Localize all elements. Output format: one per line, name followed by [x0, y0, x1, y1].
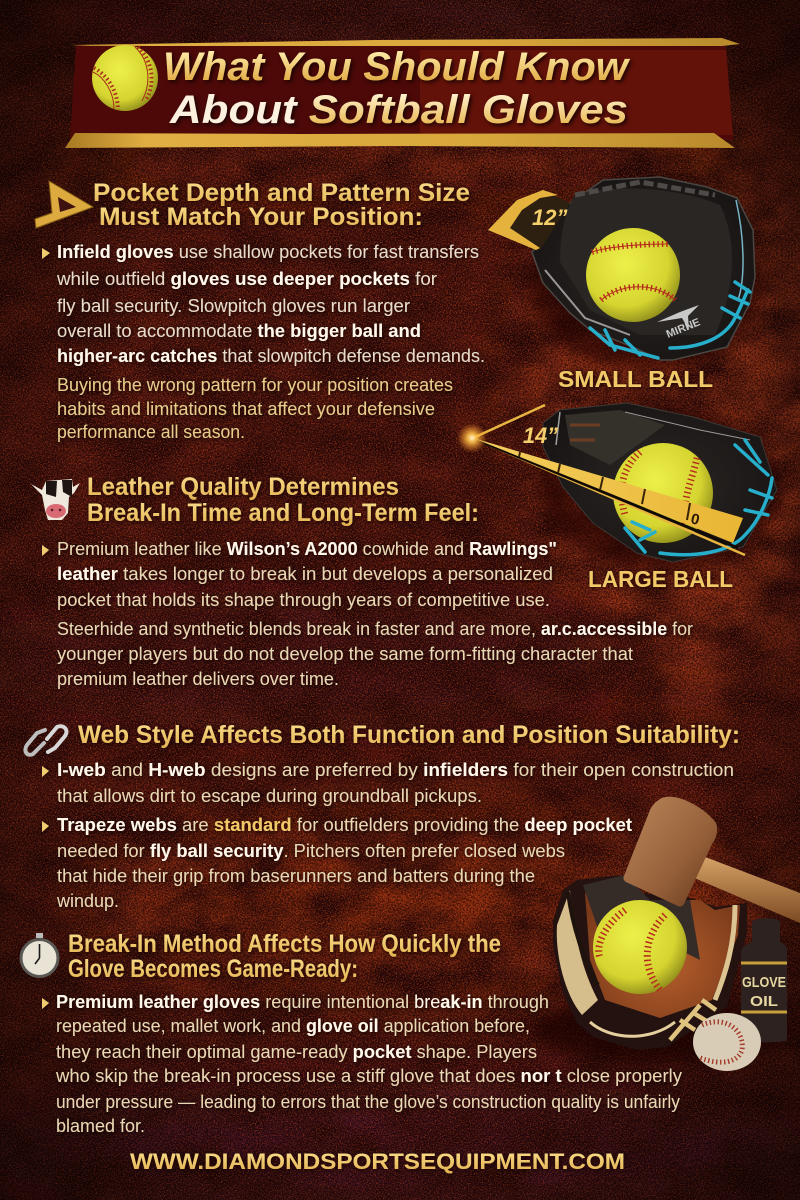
measuring tape and spark: 0: [689, 510, 701, 529]
section 4 body: who skip the break-in process use a stiff glove that does nor t close properly: [55, 1066, 682, 1086]
section 3 body: [42, 760, 734, 911]
wooden mallet: [628, 801, 800, 923]
section 1 body: [42, 242, 485, 442]
section 1 body: Buying the wrong pattern for your position creates: [57, 375, 453, 395]
section 2 heading: [87, 473, 479, 527]
blue laces: [590, 282, 750, 358]
section 1 body: higher-arc catches that slowpitch defense demands.: [57, 346, 485, 366]
bottle: glove oil: OIL: [750, 993, 778, 1010]
section 3 heading: Web Style Affects Both Function and Position Suitability:: [78, 721, 740, 749]
section 3 body: needed for fly ball security. Pitchers often prefer closed webs: [57, 841, 565, 861]
section 4: [21, 930, 682, 1136]
glove logo: [657, 305, 699, 330]
icon: chain link: [25, 726, 66, 755]
section 4 heading: Break-In Method Affects How Quickly the: [68, 930, 501, 958]
measuring tape and spark: 14”: [523, 423, 558, 448]
softball: [593, 900, 687, 994]
icon: triangle ruler: [35, 181, 93, 228]
measuring tape and spark: [457, 405, 745, 555]
softball: [613, 443, 713, 543]
section 1 body: performance all season.: [57, 422, 245, 442]
footer url: WWW.DIAMONDSPORTSEQUIPMENT.COM: [130, 1149, 625, 1174]
section 2 heading: Leather Quality Determines: [87, 473, 399, 501]
section 3 body: that hide their grip from baserunners and batters during the: [57, 866, 535, 886]
section 2 body: younger players but do not develop the same form-fitting character that: [57, 644, 633, 664]
illustration: mallet, glove, ball and glove oil: [530, 801, 800, 1071]
section 1: [35, 179, 485, 442]
gold 12 inch measure: 12”: [532, 205, 567, 230]
section 4 heading: Glove Becomes Game-Ready:: [68, 955, 358, 983]
section 1 body: overall to accommodate the bigger ball and: [57, 321, 421, 341]
icon: stopwatch: [21, 933, 58, 976]
section 3 body: windup.: [56, 891, 119, 911]
section 4 body: under pressure — leading to errors that the glove’s construction quality is unfairly: [56, 1092, 680, 1112]
illustration: small ball glove: MIRNE: [665, 316, 702, 341]
section 4 body: [42, 992, 682, 1136]
illustration: large ball glove: [457, 403, 780, 570]
glove: [553, 875, 747, 1050]
label: small ball: SMALL BALL: [558, 366, 713, 392]
section 3 body: that allows dirt to escape during groundball pickups.: [57, 786, 482, 806]
section 4 body: Premium leather gloves require intentional break-in through: [56, 992, 549, 1012]
section 3: [25, 721, 740, 911]
section 1 heading: Pocket Depth and Pattern Size: [93, 179, 470, 207]
section 1 heading: Must Match Your Position:: [99, 203, 423, 231]
section 4 body: they reach their optimal game-ready pocket shape. Players: [56, 1042, 537, 1062]
section 1 body: while outfield gloves use deeper pockets for: [56, 269, 437, 289]
section 4 body: repeated use, mallet work, and glove oil application before,: [56, 1016, 530, 1036]
gold 12 inch measure: [488, 190, 570, 250]
section 4 heading: [68, 930, 501, 983]
section 2 heading: Break-In Time and Long-Term Feel:: [87, 499, 479, 527]
section 2 body: leather takes longer to break in but develops a personalized: [57, 564, 553, 584]
title text: What You Should Know: [163, 45, 631, 89]
title text: [163, 45, 631, 132]
section 2 body: Steerhide and synthetic blends break in faster and are more, ar.c.accessible for: [57, 619, 693, 639]
section 1 heading: [93, 179, 470, 231]
bottle: glove oil: GLOVE: [742, 974, 786, 991]
section 1 body: Infield gloves use shallow pockets for fast transfers: [57, 242, 479, 262]
section 1 body: habits and limitations that affect your defensive: [57, 399, 435, 419]
section 1 body: fly ball security. Slowpitch gloves run larger: [57, 296, 410, 316]
bottle: glove oil: [741, 918, 787, 1042]
section 2 body: pocket that holds its shape through years of competitive use.: [57, 590, 550, 610]
section 2 body: premium leather delivers over time.: [57, 669, 339, 689]
section 3 body: I-web and H-web designs are preferred by infielders for their open construction: [57, 760, 734, 780]
softball: [586, 228, 680, 322]
title text: About Softball Gloves: [169, 88, 628, 132]
label: large ball: LARGE BALL: [588, 566, 733, 592]
icon: cow head: [31, 479, 80, 520]
title banner: [65, 38, 740, 148]
baseball: [693, 1013, 761, 1071]
icon: softball in banner: [92, 45, 158, 111]
section 3 body: Trapeze webs are standard for outfielders providing the deep pocket: [57, 815, 632, 835]
section 2: [31, 473, 693, 689]
illustration: small ball glove: [488, 177, 760, 370]
section 2 body: Premium leather like Wilson’s A2000 cowhide and Rawlings": [57, 539, 557, 559]
blue laces: [625, 440, 772, 555]
section 2 body: [42, 539, 693, 689]
section 4 body: blamed for.: [56, 1116, 145, 1136]
